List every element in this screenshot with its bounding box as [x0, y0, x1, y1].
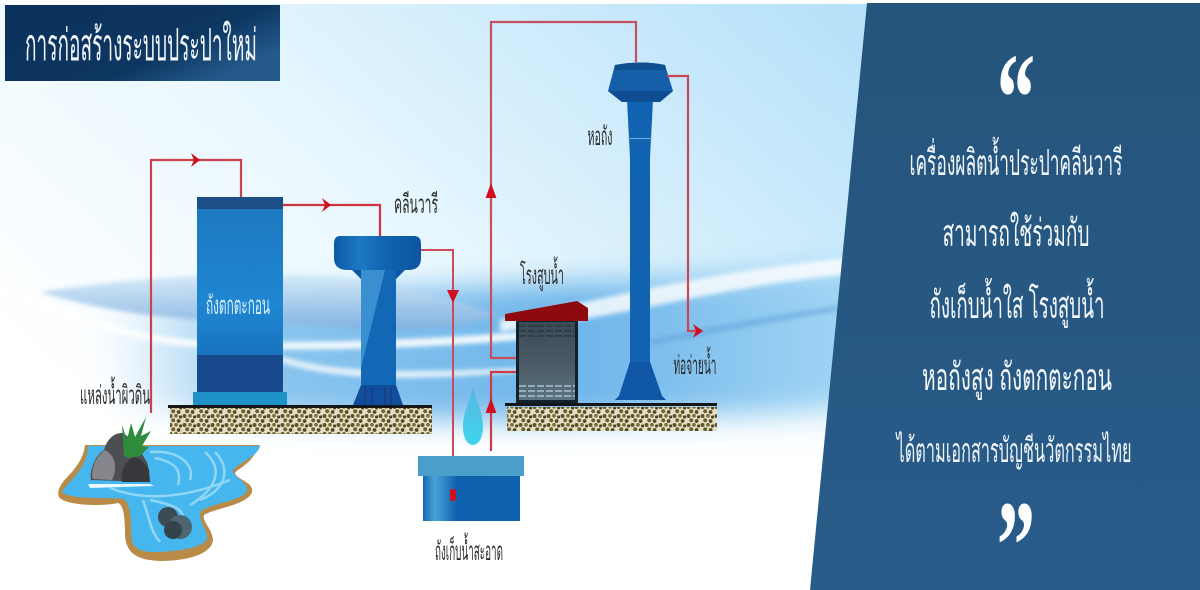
sedimentation tank: ถังตกตะกอน — [206, 290, 270, 320]
title banner — [5, 5, 280, 81]
text: ถังเก็บน้ำสะอาด — [435, 532, 503, 566]
sedimentation tank — [193, 197, 287, 405]
ground left — [168, 405, 432, 434]
text: ท่อจ่ายน้ำ — [674, 346, 716, 380]
pipe: pump house to water tower — [487, 22, 636, 358]
pipe: water tower to distribution — [667, 76, 703, 338]
pipe: sedimentation tank to clarifier — [283, 198, 380, 236]
ground right — [505, 403, 717, 431]
water drop — [463, 387, 483, 445]
text: แหล่งน้ำผิวดิน — [80, 376, 150, 410]
text: คลีนวารี — [394, 189, 438, 219]
text: การก่อสร้างระบบประปาใหม่ — [25, 20, 257, 70]
water tower — [608, 62, 673, 400]
text: หอถัง — [588, 121, 612, 151]
pond with rocks — [58, 417, 260, 561]
pipe: clarifier to clean water tank — [421, 250, 459, 495]
pipe: clean water tank to pump house — [487, 372, 516, 451]
clarifier unit — [334, 236, 421, 405]
pump house — [505, 301, 588, 403]
pipe: source to sedimentation tank — [151, 153, 241, 413]
opening quote mark: “ — [997, 27, 1035, 169]
clean water tank — [418, 456, 524, 521]
panel: quote — [810, 3, 1200, 590]
text: โรงสูบน้ำ — [520, 256, 564, 291]
